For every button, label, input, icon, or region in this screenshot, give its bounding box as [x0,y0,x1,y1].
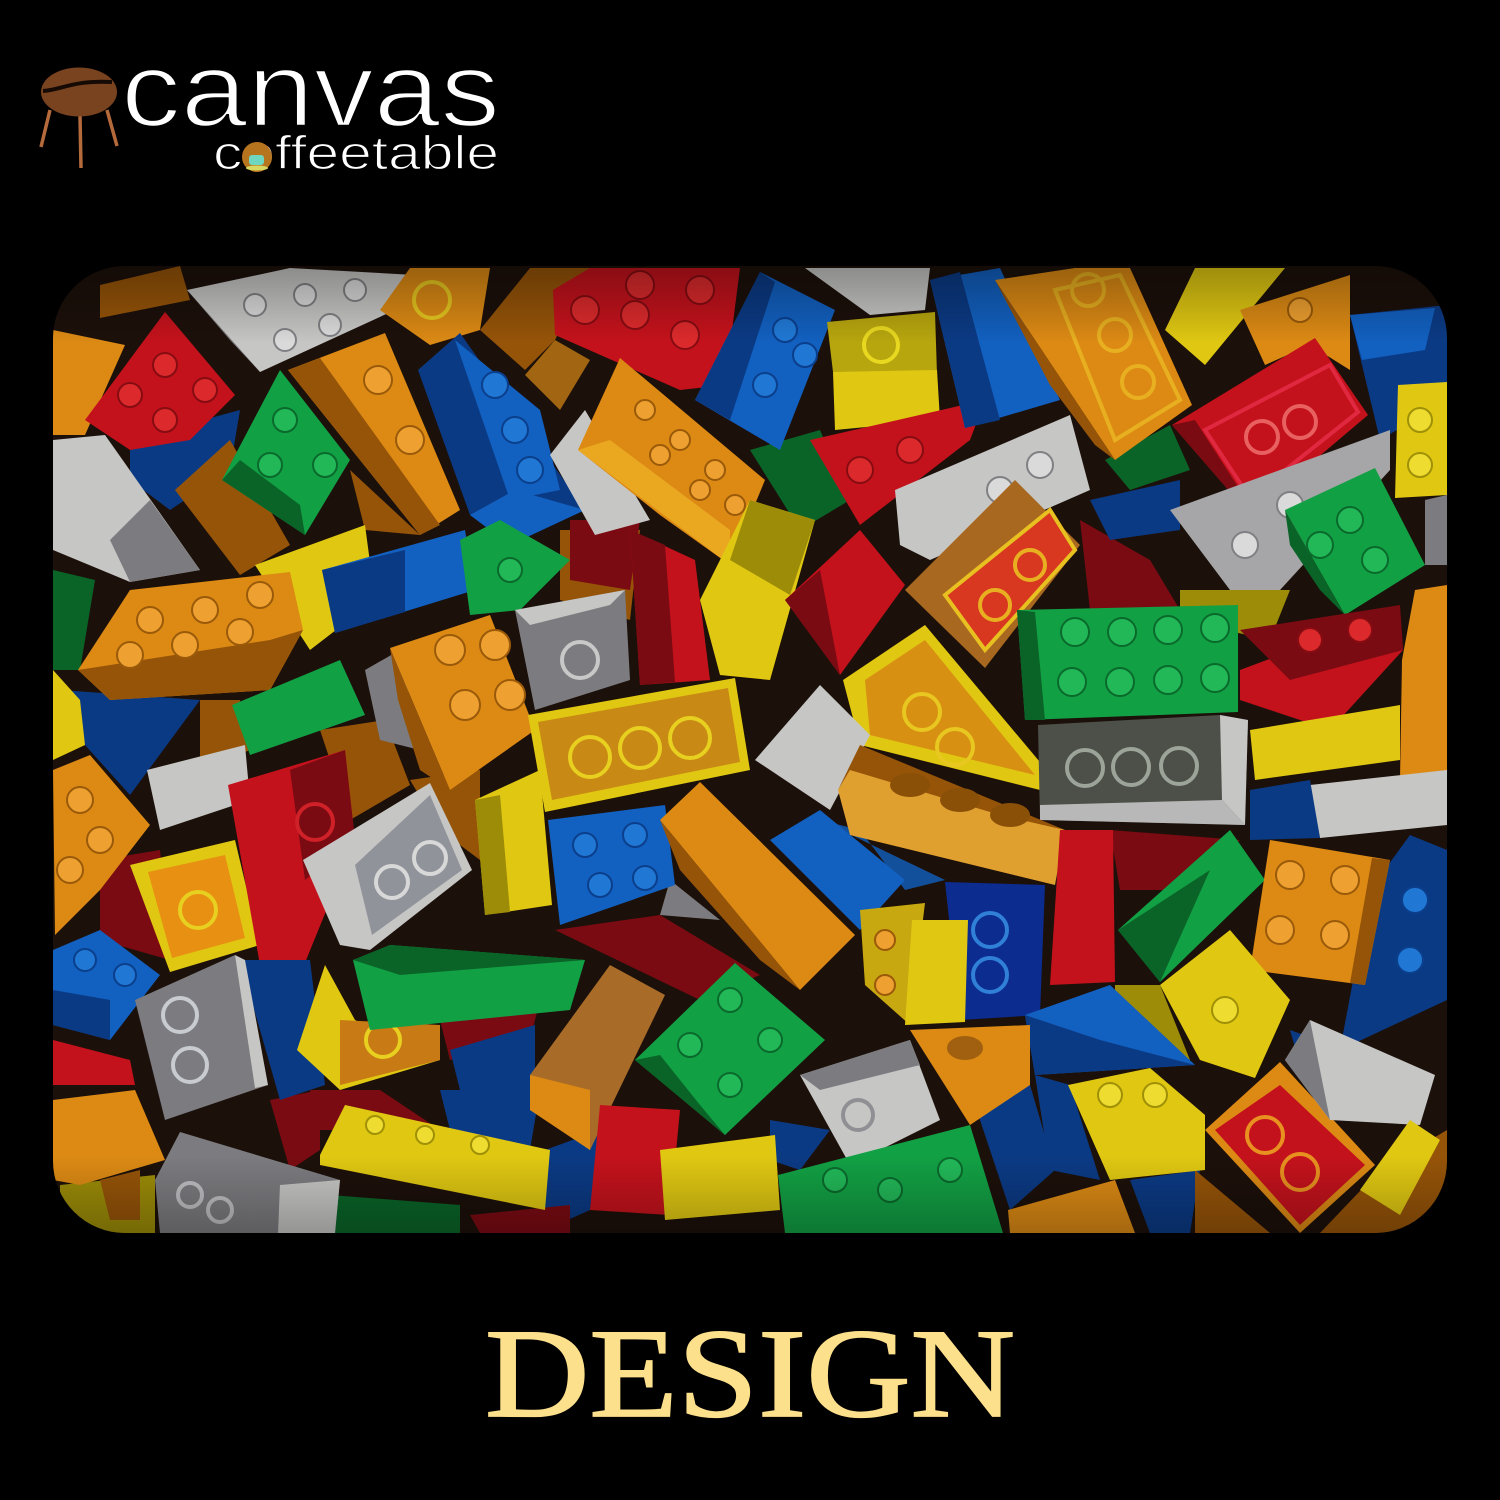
brick: blue far right [1350,305,1447,440]
brick: white top [187,268,415,372]
brick: white right centre [895,415,1090,560]
brick: orange low centre [530,965,665,1150]
brick: grey small mid [515,590,630,710]
brick: green left [222,370,350,535]
brick: orange low right [1250,840,1390,985]
brick: orange underside [838,745,1065,885]
brick: green large right [1017,605,1238,720]
brick: orange top right [1240,275,1350,370]
brick: white left [53,435,200,582]
brick: red tall [228,750,355,975]
brick: red top left [85,312,235,450]
brick: yellow vertical centre [700,500,815,680]
brick: orange yellow top [380,268,490,345]
brick: yellow low [297,965,440,1090]
brick: green low mid left [232,660,365,755]
brick: orange top left [53,266,190,435]
brick: green bottom centre [778,1125,1003,1233]
brick: yellow right side [1250,705,1400,780]
panel: lego bricks photo [53,266,1447,1233]
brick: blue with yellow rim [945,882,1045,1020]
brick: white right [1170,430,1390,590]
brick: red vertical low right [1050,830,1115,985]
brick: blue low centre [770,810,905,930]
brick: green long low [353,945,585,1030]
brick: blue top right [930,268,1060,428]
brick: grey low left [135,955,268,1120]
brick: orange right of centre [910,1025,1030,1125]
brick: blue mid [322,530,475,633]
brick: blue top left centre [418,333,585,545]
brick: red bottom centre [590,1105,680,1215]
brick: blue lower right [1250,780,1320,840]
brick: yellow mid back [255,525,375,650]
brick: red left edge low [53,1040,135,1085]
brick: dark fill colours [60,340,1447,1233]
brick: red top center [553,268,740,390]
brick: blue studs centre [548,805,675,925]
brick: orange top left centre [288,333,460,535]
brick: yellow low right [1160,930,1290,1078]
brick: red right [1172,338,1368,489]
brick: orange studs mid [390,615,535,790]
brick: blue right edge [1340,835,1447,1050]
brick: orange bottom right of centre [1008,1180,1135,1233]
brick: yellow low centre right [1068,1068,1205,1180]
brick: red centre [785,530,905,675]
brick: blue low centre right [1025,985,1195,1075]
brick: yellow vertical low [475,770,552,915]
brick: red yellow low left [130,840,260,972]
brick: orange long left [78,572,303,700]
icon: coffee bean table [41,68,117,168]
brick: yellow far right [1395,382,1447,498]
logo [41,31,500,179]
brick: yellow cube low [860,903,968,1025]
brick: white small centre [755,685,870,810]
brick: white lower right [1310,770,1447,838]
brick: green far left [53,570,95,670]
brick: green low right [1118,830,1265,982]
brick: white cube low [800,1040,940,1165]
brand subtitle: coffeetable [213,126,499,179]
brick: yellow bottom right [1360,1120,1440,1215]
brick: green mid [460,520,570,615]
brick: red orange lower right [1205,1062,1375,1233]
brick: orange yellow centre [578,358,765,565]
brick: blue left edge [53,930,160,1040]
brick: green right [1285,468,1425,615]
brick: orange back [480,268,590,370]
brick: green low centre [635,963,825,1135]
brick: orange long diagonal [660,782,855,990]
brick: red center back [810,400,985,525]
brick: blue low left [240,960,325,1100]
title: DESIGN [485,1304,1015,1444]
brick: white grey low [303,783,472,950]
brick: orange left edge [53,755,150,935]
brick: grey transparent right [1038,715,1248,825]
brick: blue top center [695,272,835,450]
brick: yellow orange big right centre [843,625,1055,790]
brick: white lower right [1285,1020,1435,1125]
brick: orange big top right [995,268,1192,460]
brick: orange far right [1400,585,1447,780]
brick: red dark low [555,915,760,1000]
brick: red vertical centre [630,530,710,685]
icon: coffee cup [242,142,272,172]
brick: brown red right centre [905,480,1080,668]
brick: red right side [1240,605,1403,730]
brick: white grey bottom [155,1132,340,1233]
brick: white back top [805,268,930,315]
brick: yellow far left [53,670,85,760]
brick: yellow top right [1165,268,1285,365]
brick: yellow with orange studs [528,678,750,812]
brick: yellow long bottom [320,1105,550,1210]
brick: white sliver [550,410,650,535]
brick: yellow cube top [827,312,940,430]
panel shading [53,266,1447,1233]
brick: yellow bottom centre [660,1135,780,1220]
brand name: canvas [121,31,500,149]
brick: white low left [147,745,250,830]
brick: orange low left [53,1090,165,1185]
